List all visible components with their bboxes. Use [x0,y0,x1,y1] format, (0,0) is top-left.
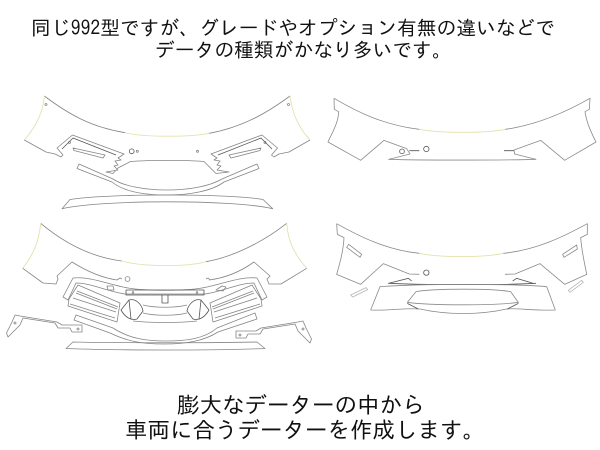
heading: top caption: 同じ992型ですが、グレードやオプション有無の違いなどで [31,19,555,38]
splitter strip [62,195,273,209]
hood outline [23,223,307,284]
panel: lower-left pattern set [6,223,312,350]
left vents [68,285,120,322]
rear bumper lower section [371,284,555,313]
grille assembly [63,278,267,322]
hood outline [328,98,596,160]
text block: bottom caption: 車両に合うデーターを作成します。 [125,418,485,441]
left side strip [6,315,82,337]
heading: top caption [31,18,555,60]
hood outline [337,224,587,285]
text block: bottom caption [125,393,485,441]
lower lip strip [74,313,257,344]
round intakes [121,300,143,320]
panel: lower-right pattern set [337,224,587,313]
heading: top caption: データの種類がかなり多いです。 [155,41,452,60]
hood outline [24,96,310,174]
lower lip strip [77,164,259,195]
panel: top-right pattern set [328,98,596,160]
right side strip [236,321,312,343]
right vents [210,285,262,322]
text block: bottom caption: 膨大なデーターの中から [177,393,424,416]
side slits [351,280,583,297]
panel: top-left pattern set [24,96,310,209]
splitter strip [66,342,265,350]
